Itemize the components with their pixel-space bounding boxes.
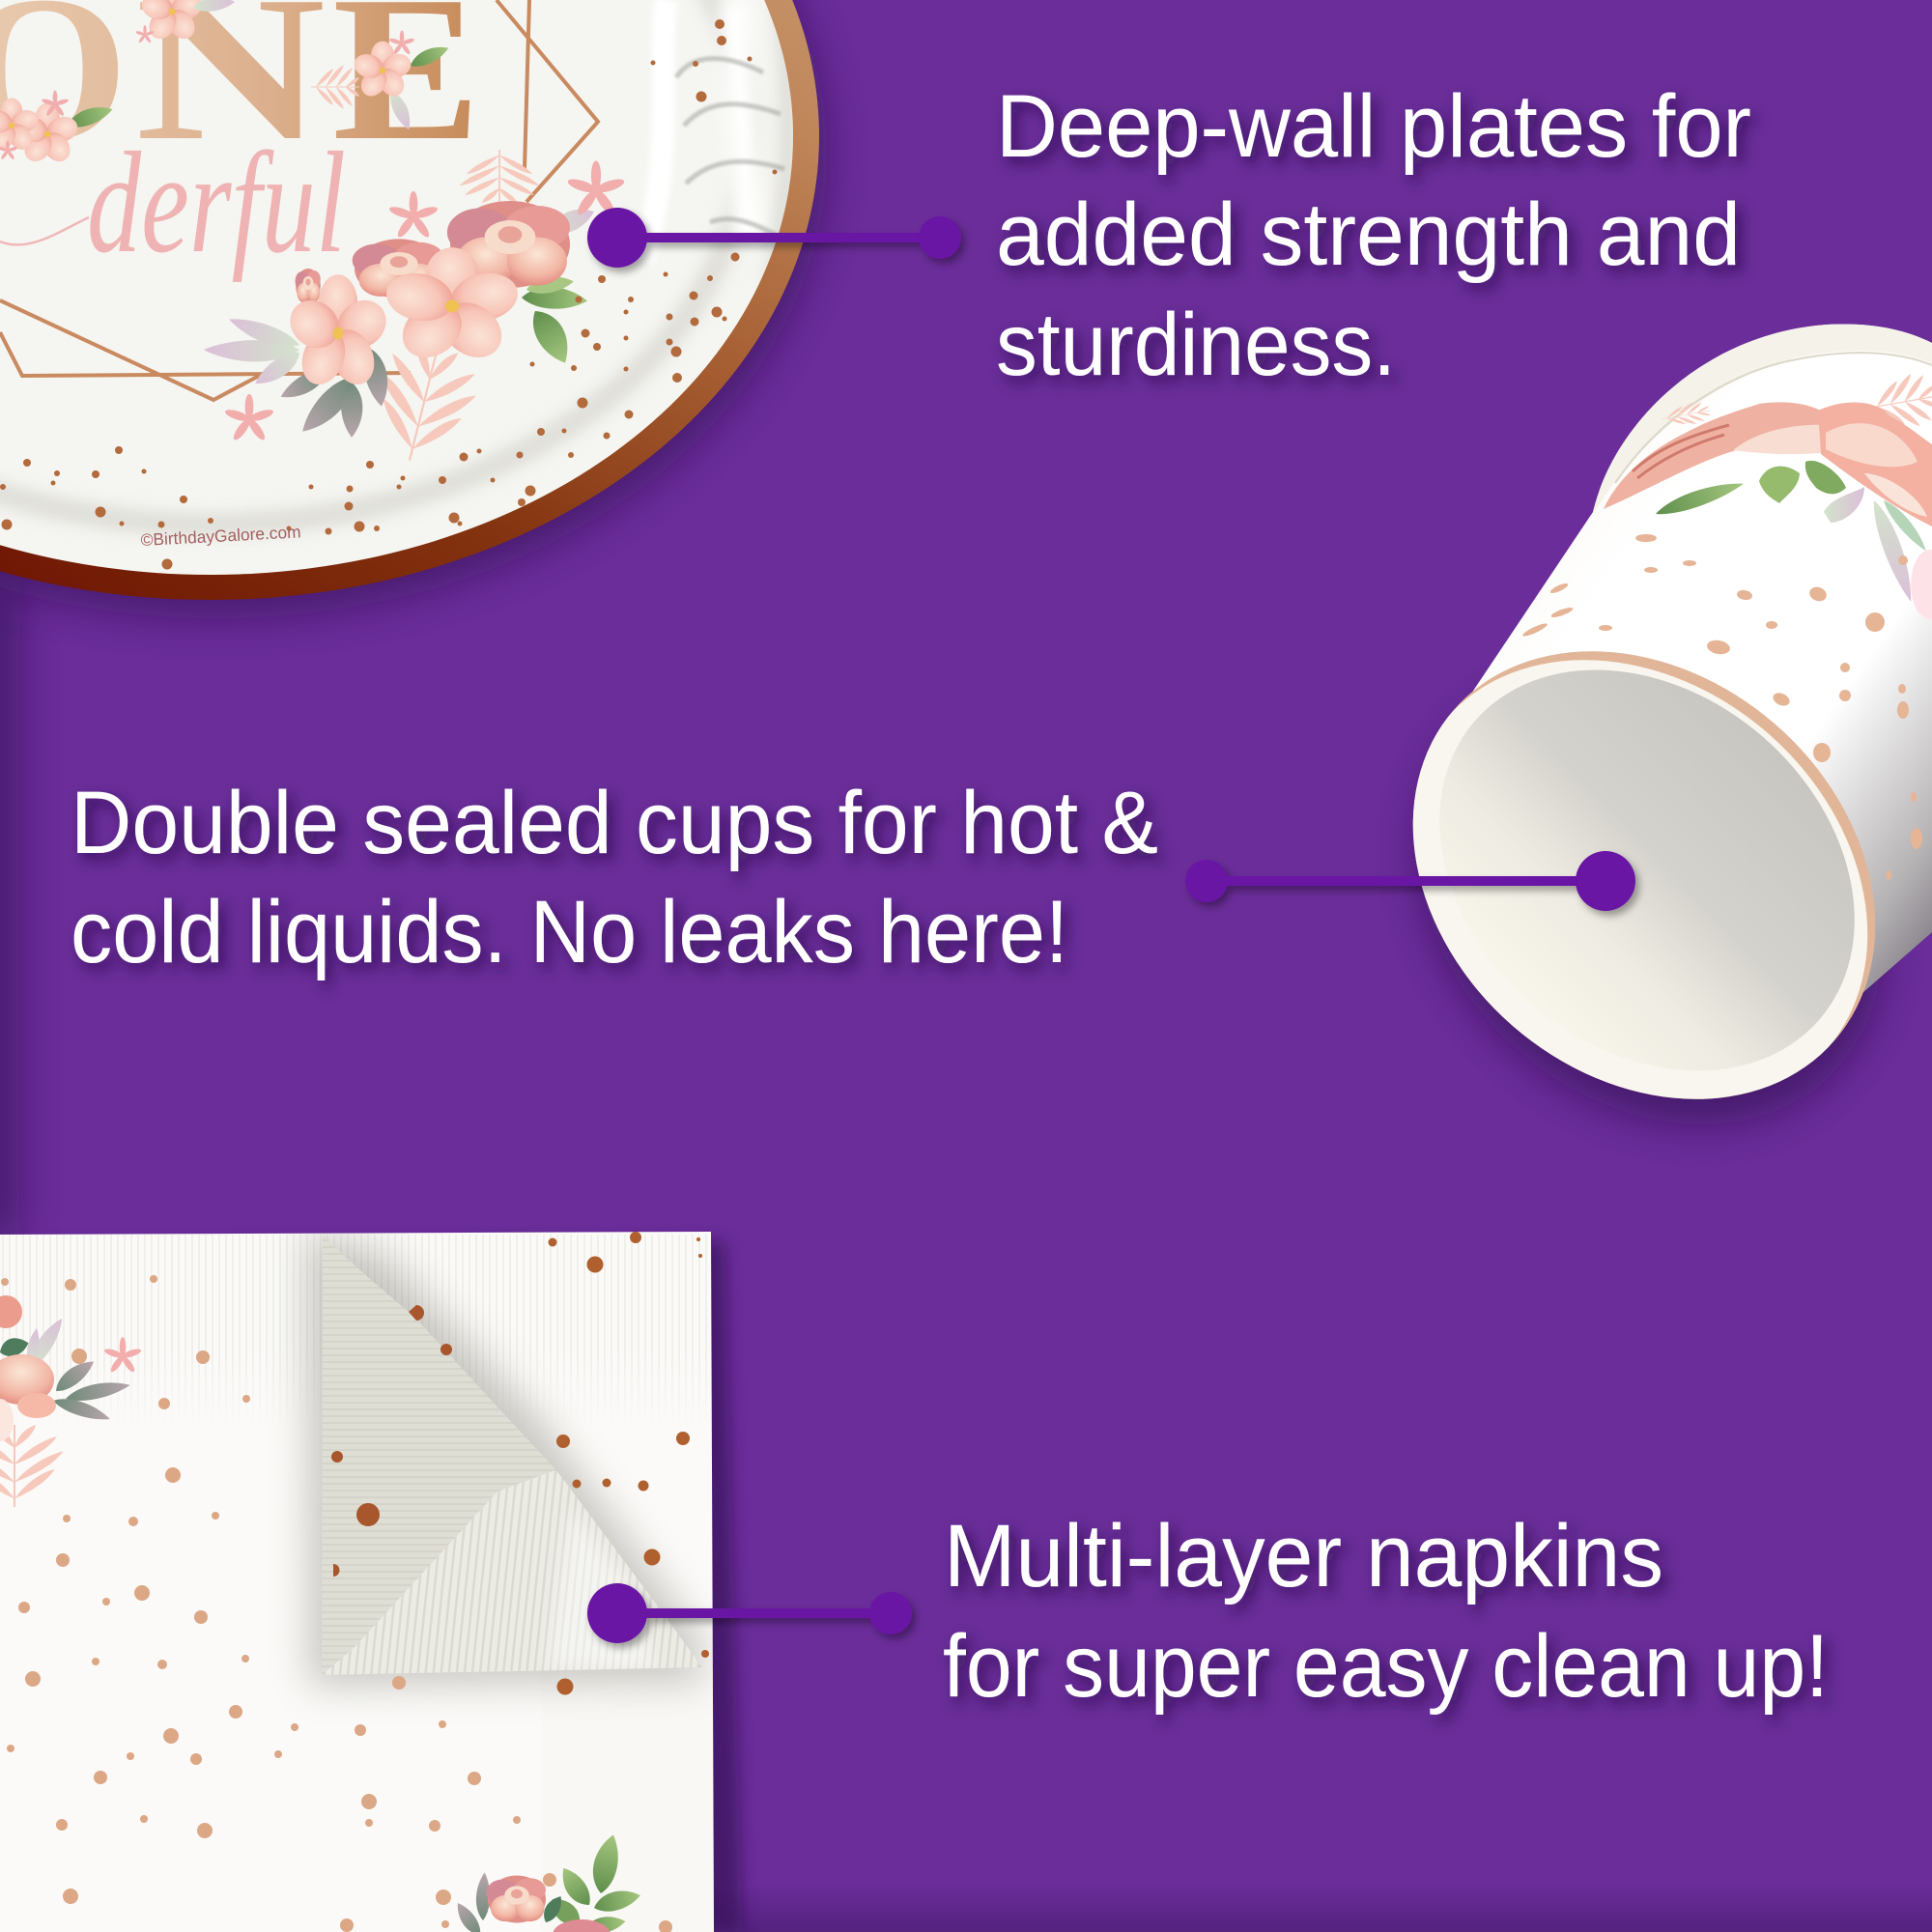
cup base lip (1412, 660, 1868, 1099)
napkin (0, 1232, 742, 1932)
plate copyright: ©BirthdayGalore.com (140, 522, 301, 550)
plate title ONE (0, 0, 481, 184)
callout: napkin connector (587, 1583, 912, 1643)
napkin left bouquet (0, 1295, 142, 1507)
cup rim lip (1593, 325, 1932, 512)
text: cups caption: Double sealed cups for hot & (71, 774, 1158, 872)
text: cups caption (71, 774, 1158, 981)
napkin lower bouquet (451, 1833, 642, 1932)
text: cups caption: cold liquids. No leaks here! (71, 883, 1068, 981)
napkin dark dots (549, 1232, 709, 1694)
cup floral print (1604, 370, 1932, 619)
plate script derful (0, 123, 346, 283)
cup (1403, 325, 1932, 1141)
callout: cup connector (1185, 851, 1635, 911)
napkin light dots (1, 1275, 672, 1932)
text: plates caption: sturdiness. (996, 296, 1396, 394)
plate small blossoms (0, 0, 451, 167)
cup inner base (1359, 587, 1932, 1153)
cup copper band (1322, 559, 1932, 1191)
text: plates caption: added strength and (996, 185, 1741, 284)
callout: plate connector (587, 208, 961, 268)
plate stars (224, 160, 626, 442)
fold shadow (307, 1235, 702, 1686)
text: napkins caption: Multi-layer napkins (944, 1507, 1663, 1605)
plate hexagon frames (0, 0, 598, 400)
text: plates caption: Deep-wall plates for (996, 77, 1751, 176)
plate floral bouquet (204, 150, 598, 472)
text: napkins caption (943, 1507, 1829, 1716)
cup confetti dots (1521, 534, 1922, 880)
napkin fold flap (319, 1232, 705, 1681)
plate script derful: derful (87, 123, 346, 283)
text: napkins caption: for super easy clean up! (943, 1617, 1829, 1716)
plate (0, 0, 827, 618)
plate confetti dots (0, 19, 777, 570)
text: plates caption (996, 77, 1751, 394)
